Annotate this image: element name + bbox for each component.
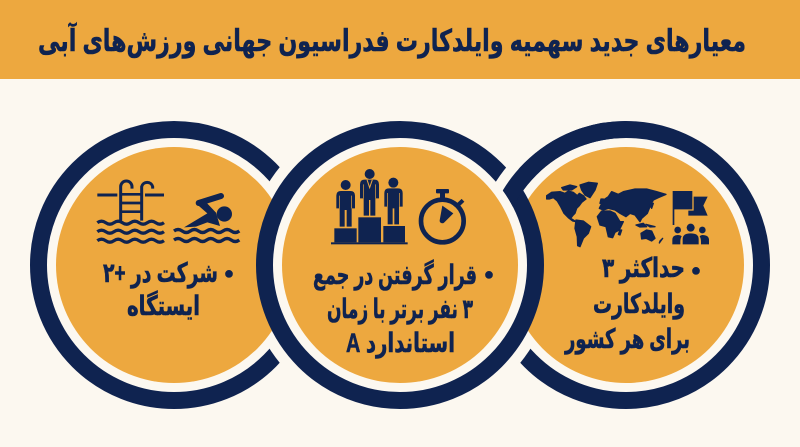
panel: middle circle, top three [264,130,626,400]
panel: left circle, participation [30,121,280,409]
header band [0,0,800,79]
text: top three rule: • [485,261,493,289]
icon: podium with athletes [331,169,408,244]
icon: swimmer [174,196,239,241]
text: top three rule: قرار گرفتن در جمع [313,259,477,291]
text: participation rule: ایستگاه [127,290,200,321]
text: country limit rule: وایلدکارت [593,289,685,320]
text: country limit rule: برای هر کشور [564,324,690,355]
icon: flag and people [672,191,709,244]
text: top three rule: ۳ نفر برتر با زمان [327,294,473,325]
text: participation rule: شرکت در +۲ [103,258,218,289]
text: participation rule: • [225,260,233,288]
text: participation rule [103,258,233,321]
text: top three rule: استاندارد A [346,328,455,359]
text: country limit rule [564,253,700,355]
text: country limit rule: حداکثر ۳ [602,253,685,284]
icon: pool ladder [97,181,164,242]
icon: world map [547,182,666,247]
panel: right circle, country limit [518,121,770,409]
icon: stopwatch [421,189,464,242]
text: country limit rule: • [692,257,700,285]
text: top three rule [313,259,493,359]
